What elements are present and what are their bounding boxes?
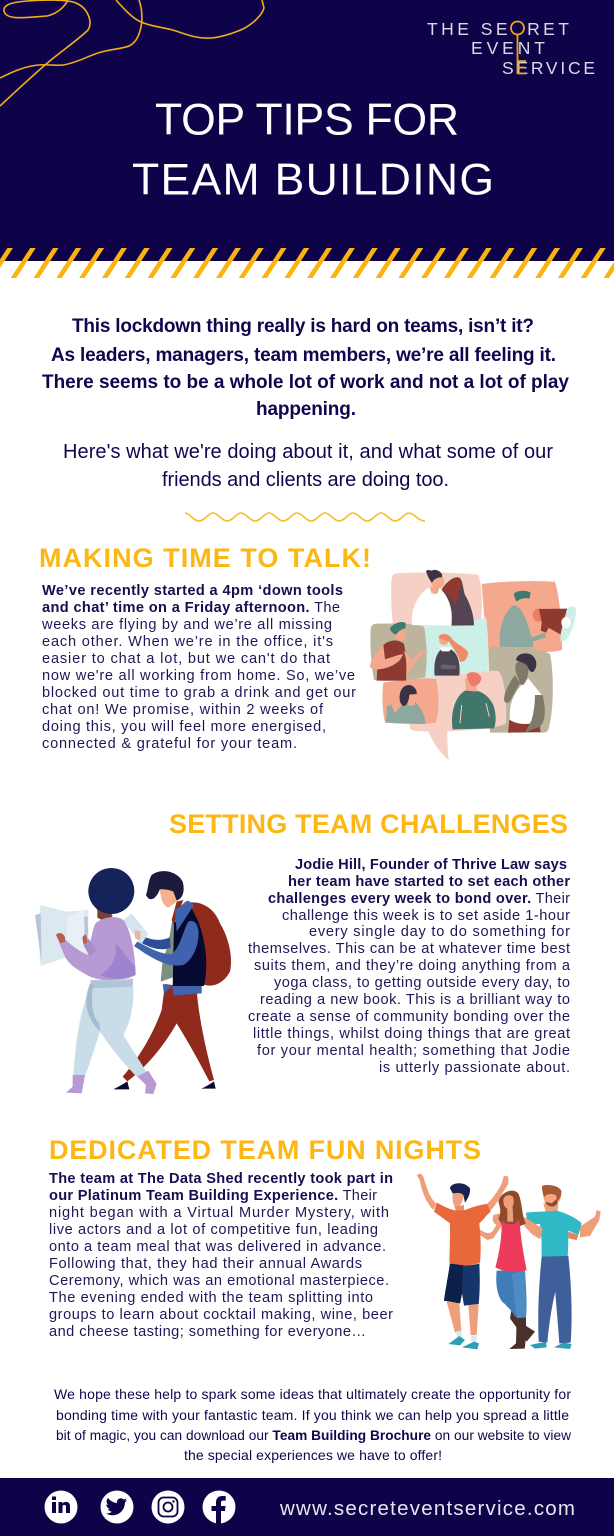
logo: The Secret Event Service [427,19,595,78]
body text: suits them, and they’re doing anything from a [254,958,571,974]
speech bubbles [370,572,562,760]
person: woman in pink top [478,1191,543,1349]
person: man with backpack [113,871,231,1089]
body text: and cheese tasting; something for everyone… [49,1324,366,1340]
illustration: two people with map and backpack [35,868,231,1094]
intro subtext: Here's what we're doing about it, and what some of our [63,441,553,463]
illustration: three friends cheering [417,1173,601,1349]
person: man in orange shirt [417,1173,508,1349]
body text: and chat’ time on a Friday afternoon. The [42,600,340,616]
body text: We’ve recently started a 4pm ‘down tools [42,583,343,599]
person: man with megaphone [500,591,576,647]
heading: SETTING TEAM CHALLENGES [169,809,568,839]
body text: doing this, you will feel more energised, [42,719,326,735]
body text: Ceremony, which was an emotional masterpiece. [49,1273,389,1289]
body text: challenges every week to bond over. Their [268,891,570,907]
website url: www.secreteventservice.com [279,1497,575,1520]
body text: for your mental health; something that Jodie [257,1043,570,1059]
body text: The evening ended with the team splitting into [49,1290,373,1306]
logo: The Secret Event Service: SERVICE [502,58,595,78]
body text: blocked out time to grab a drink and get our [42,685,356,701]
body text: chat on! We promise, within 2 weeks of [42,702,324,718]
person: man in teal shirt [526,1185,601,1349]
body text: each other. When we’re in the office, it's [42,634,333,650]
body text: little things, whilst doing things that are great [253,1026,570,1042]
title: TOP TIPS FOR [155,96,459,144]
title: TEAM BUILDING [132,156,494,204]
title [132,96,494,204]
intro text: happening. [256,399,356,420]
closing paragraph: the special experiences we have to offer! [184,1447,442,1463]
body text: her team have started to set each other [288,874,570,890]
heading: MAKING TIME TO TALK! [39,543,371,573]
person: woman with afro [35,868,157,1094]
icon: twitter [100,1490,134,1524]
wavy divider [185,513,425,521]
body text: create a sense of community bonding over the [248,1009,570,1025]
footer bar [0,1478,614,1536]
header panel [0,0,614,261]
icon: instagram [152,1490,184,1524]
body text: Following that, they had their annual Awards [49,1256,362,1272]
body text: onto a team meal that was delivered in advance. [49,1239,386,1255]
body text: now we're all working from home. So, we’ve [42,668,355,684]
person: man gesturing [370,622,429,681]
body text: night began with a Virtual Murder Mystery, with [49,1205,389,1221]
body text: The team at The Data Shed recently took part in [49,1171,393,1187]
intro text: As leaders, managers, team members, we’re all feeling it. [51,345,556,366]
body text: groups to learn about cocktail making, wine, beer [49,1307,393,1323]
intro subtext [63,441,553,491]
body text: our Platinum Team Building Experience. Their [49,1188,377,1204]
body text: themselves. This can be at whatever time best [248,941,570,957]
person: woman with orange hair [434,634,468,676]
body text: every single day to do something for [309,924,570,940]
closing paragraph: bonding time with your fantastic team. If you think we can help you spread a little [56,1407,569,1423]
body text [41,583,356,752]
section: making time to talk [39,543,576,760]
body text: is utterly passionate about. [379,1060,570,1076]
body text: yoga class, to getting outside every day, to [274,975,570,991]
decorative gold squiggle lines [0,0,264,106]
body text [248,857,571,1076]
logo: The Secret Event Service: EVENT [471,38,545,58]
intro text: There seems to be a whole lot of work and not a lot of play [42,372,569,393]
closing paragraph [54,1386,571,1463]
icon: facebook [202,1490,236,1524]
icon: linkedin [44,1490,78,1524]
person: green sweater [452,672,496,729]
person: two people top [412,570,474,626]
body text: reading a new book. This is a brilliant way to [260,992,570,1008]
body text: weeks are flying by and we’re all missing [41,617,332,633]
icon: gold key [511,22,526,74]
body text: Jodie Hill, Founder of Thrive Law says [295,857,567,873]
logo: The Secret Event Service: THE SECRET [427,19,569,39]
body text: challenge this week is to set aside 1-hour [282,908,570,924]
section: dedicated team fun nights [49,1135,601,1349]
body text: easier to chat a lot, but we can't do that [42,651,330,667]
body text [49,1171,393,1340]
intro text [42,316,569,420]
body text: connected & grateful for your team. [42,736,297,752]
intro text: This lockdown thing really is hard on teams, isn’t it? [72,316,534,337]
heading: DEDICATED TEAM FUN NIGHTS [49,1135,481,1165]
illustration: people in speech bubbles [370,570,576,760]
intro subtext: friends and clients are doing too. [162,469,449,491]
person: woman waving lower left [385,685,426,724]
hazard stripe band [0,248,614,278]
body text: live actors and a lot of competitive fun, leading [49,1222,378,1238]
person: woman on phone [504,653,545,733]
section: setting team challenges [35,809,571,1094]
closing paragraph: We hope these help to spark some ideas that ultimately create the opportunity for [54,1386,571,1402]
closing paragraph: bit of magic, you can download our Team Building Brochure on our website to view [56,1428,571,1443]
